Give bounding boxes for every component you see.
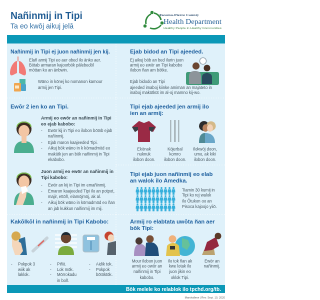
panel: spreading: Ej aikuj bōb an bed ilurin juon bbox=[130, 58, 184, 62]
icon: lungs bbox=[10, 56, 26, 75]
panel: TB in America: Tiamin 30 kumij in bbox=[182, 188, 216, 192]
icon: two people on a sofa bbox=[186, 58, 219, 85]
panel: at risk: Ewōr an bbox=[204, 258, 220, 264]
icon: couple kissing bbox=[199, 121, 216, 143]
title bbox=[10, 11, 82, 30]
panel: at risk: bōk Tipi: bbox=[130, 226, 154, 232]
logo: health department: Health Department bbox=[164, 17, 222, 26]
symptom list 2: Lok mōk. bbox=[57, 267, 74, 272]
symptom list 1: wiik ak bbox=[18, 267, 31, 272]
symptom list 2: - bbox=[50, 272, 52, 277]
panel: TB in America bbox=[130, 172, 217, 212]
panel: spreading: Ejab bidodo an Tipi bbox=[130, 79, 165, 84]
panel: how TB spreads: nuknuk bbox=[137, 152, 152, 156]
panel: TB in America: Tipi ejab juon nañinmij eo elab bbox=[130, 172, 213, 178]
panel: two types of TB: Ewōr kij in Tipi eo ilobon bōtnb ejab bbox=[48, 128, 113, 133]
icon: coughing person bbox=[14, 172, 34, 205]
panel: at risk: kabobo. bbox=[140, 275, 154, 280]
panel: how TB spreads: komro bbox=[169, 152, 181, 156]
panel: at risk: nañinmij in Tipi bbox=[133, 269, 161, 274]
symptom list 3: - bbox=[89, 262, 91, 266]
panel: active TB: Ewōr an kij in Tipi im emañinmij. bbox=[48, 182, 106, 188]
symptom list 2: Mōrrokadu bbox=[57, 272, 77, 277]
panel: active TB: - bbox=[41, 182, 43, 188]
panel: two types of TB: Ejab maron kaajeeded Tipi. bbox=[48, 140, 98, 145]
panel: two types of TB: - bbox=[41, 128, 43, 133]
panel: how TB spreads: umo, ak kiki bbox=[194, 152, 216, 156]
panel: at risk: Armij ro elabtata uwōta ñan aer bbox=[130, 220, 215, 226]
panel: active TB: an jab kukkun nañinmij im mij. bbox=[48, 206, 103, 211]
title: Ta eo kwōj aikuj jelā bbox=[10, 22, 74, 30]
symptom list 3: Aidik tok. bbox=[96, 262, 113, 266]
panel: active TB: Tipi kabobo: bbox=[41, 175, 68, 180]
panel: active TB: Aikuj bōk wāno in kōmadmōd eo ñan bbox=[48, 200, 116, 205]
panel: two types of TB: Aikuj bōk wāno in k kōmadmōd eo bbox=[48, 146, 111, 150]
panel: two types of TB: Ewōr 2 ien ko an Tipi. bbox=[10, 104, 69, 110]
bottom teal bar: Bōk melele ko relablok ilo tpchd.org/tb. bbox=[126, 287, 221, 293]
panel: two types of TB: eo ejab kabobo: bbox=[41, 122, 76, 126]
panel: spreading: ilobon ñan am bōtke. bbox=[130, 68, 168, 72]
panel: two types of TB: ekabobo. bbox=[48, 157, 65, 162]
icon: medicine bbox=[14, 79, 26, 92]
symptom list 3: Pokpok bbox=[96, 267, 111, 272]
symptom list 2: in boñ. bbox=[57, 278, 69, 283]
symptom list 1: laklok. bbox=[18, 272, 30, 277]
symptom list 1 bbox=[11, 262, 36, 277]
panel: what is TB: mōttan ko an ānbwin. bbox=[29, 68, 68, 72]
panel: at risk: Mour ilobon juon bbox=[132, 258, 163, 264]
panel: TB in America: Pisoca kajoojo yiiō. bbox=[182, 204, 217, 209]
panel: how TB spreads: ilobon doon. bbox=[194, 157, 216, 162]
footer note: Marshallese | Rev. Sept. 10, 2020 bbox=[185, 296, 225, 300]
panel: two types of TB: makūtk jen an bōk nañinmij in Tipi bbox=[48, 152, 110, 156]
icon: thermometer bbox=[33, 238, 47, 251]
panel: active TB: majir, ettōñ, elamōjmōj, ak al. bbox=[48, 194, 101, 199]
panel: what is TB bbox=[10, 50, 110, 92]
panel: active TB: - bbox=[41, 200, 43, 205]
panel: spreading bbox=[130, 50, 219, 95]
panel: TB in America: Tipi ko rej walok bbox=[182, 192, 212, 198]
icon: weight scale bbox=[83, 235, 99, 252]
panel: how TB spreads: ilobon doon. bbox=[164, 157, 186, 162]
icon: caregiver with elder bbox=[134, 235, 159, 256]
top teal bar bbox=[7, 35, 225, 44]
symptom list 1: Pokpok 3 bbox=[18, 262, 36, 266]
symptom list 1: - bbox=[11, 262, 13, 266]
panel: two types of TB: - bbox=[41, 140, 43, 145]
panel: two types of TB: Armij eo ewōr an nañinmij in Tipi bbox=[41, 116, 111, 120]
bottom teal bar bbox=[7, 285, 225, 293]
panel: how TB spreads: ilobon doon. bbox=[133, 157, 155, 162]
icon: shirt bbox=[132, 121, 156, 142]
panel: spreading: armij eo ewōr an Tipi kabobo bbox=[130, 62, 183, 68]
panel: at risk: Ilo tok ñan ak bbox=[168, 258, 193, 264]
logo: health department: Healthy People in Healthy Communities bbox=[164, 26, 222, 30]
panel: at risk: kwe lotak ilo bbox=[169, 264, 192, 268]
panel: background bbox=[7, 43, 225, 285]
panel: active TB: - bbox=[41, 188, 43, 194]
panel: what is TB: armij jen Tipi. bbox=[38, 85, 62, 90]
symptom list 3: - bbox=[89, 267, 91, 272]
panel: symptoms: Kakōlkōl in nañinmij in Tipi Kabobo: bbox=[10, 220, 109, 226]
panel: two types of TB: - bbox=[41, 146, 43, 150]
symptom list 3: bōtōktōk. bbox=[96, 272, 113, 277]
panel: at risk: oklok Tipi. bbox=[171, 275, 189, 280]
panel: what is TB: Elañ armij Tipi eo aer obed ilo ānko aer. bbox=[29, 58, 101, 62]
panel: TB in America: an walok ilo Amedka. bbox=[130, 178, 188, 184]
symptom list 2: - bbox=[50, 267, 52, 272]
icon: elder with cane bbox=[202, 233, 221, 255]
icon: coughing person with blanket bbox=[11, 231, 27, 255]
panel: how TB spreads: Kōjerbal bbox=[167, 146, 183, 152]
symptom list 2: - bbox=[50, 262, 52, 266]
symptom list 2: Piñō. bbox=[57, 262, 66, 266]
logo: health department: Tacoma-Pierce County bbox=[159, 13, 199, 17]
panel: how TB spreads: Tipi ejab ajeeded jen armij ilo bbox=[130, 104, 209, 110]
panel: spreading: ajeeded imaboj kiinke amiman an majateto in bbox=[130, 85, 213, 90]
panel: at risk: nañinmij. bbox=[204, 264, 220, 268]
panel: active TB: Juon armij eo ewōr an nañinmij in bbox=[41, 169, 114, 174]
panel: what is TB: Bōtab armaran kajoorbōk pālebedōl bbox=[29, 62, 94, 68]
panel: active TB bbox=[14, 169, 116, 211]
panel: two types of TB bbox=[10, 104, 113, 162]
icon: rows of people bbox=[136, 187, 176, 212]
panel: spreading: inaboj makūtkūt im al-oj mamno kij-wo. bbox=[130, 90, 201, 95]
icon: tired person bbox=[104, 232, 116, 255]
icon: traveller and globe bbox=[166, 235, 195, 256]
icon: healthy person bbox=[14, 122, 34, 153]
panel: spreading: Ejab bidod an Tipi ajeeded. bbox=[130, 50, 204, 56]
symptom list 2 bbox=[50, 262, 77, 283]
symptom list 3 bbox=[89, 262, 113, 277]
panel: TB in America: ilo Ōtukon oo an bbox=[182, 198, 213, 204]
icon: cutlery bbox=[170, 120, 179, 142]
panel: symptoms bbox=[10, 220, 116, 283]
panel: how TB spreads: ien an armij: bbox=[130, 111, 164, 117]
title: Nañinmij in Tipi bbox=[10, 11, 82, 22]
panel: how TB spreads bbox=[130, 104, 217, 162]
panel: at risk bbox=[130, 220, 221, 280]
icon: sweating person bbox=[55, 232, 77, 255]
panel: how TB spreads: Ekōnak bbox=[137, 146, 152, 152]
panel: what is TB: Wāno in kōnej ko nomanon kamour bbox=[38, 79, 103, 84]
panel: two types of TB: nañinmij. bbox=[48, 134, 64, 138]
logo: health department bbox=[143, 11, 222, 30]
panel: active TB: Emaron kaajeeded Tipi ilo an potpot, bbox=[48, 188, 114, 194]
panel: what is TB: Nañinmij in Tipi ej juon nañinmij jen kij. bbox=[10, 50, 110, 56]
panel: at risk: juon jikin eo bbox=[168, 269, 192, 274]
panel: how TB spreads: Ilokwōj doon, bbox=[193, 146, 217, 152]
panel: at risk: armij eo owōr an bbox=[132, 264, 163, 268]
